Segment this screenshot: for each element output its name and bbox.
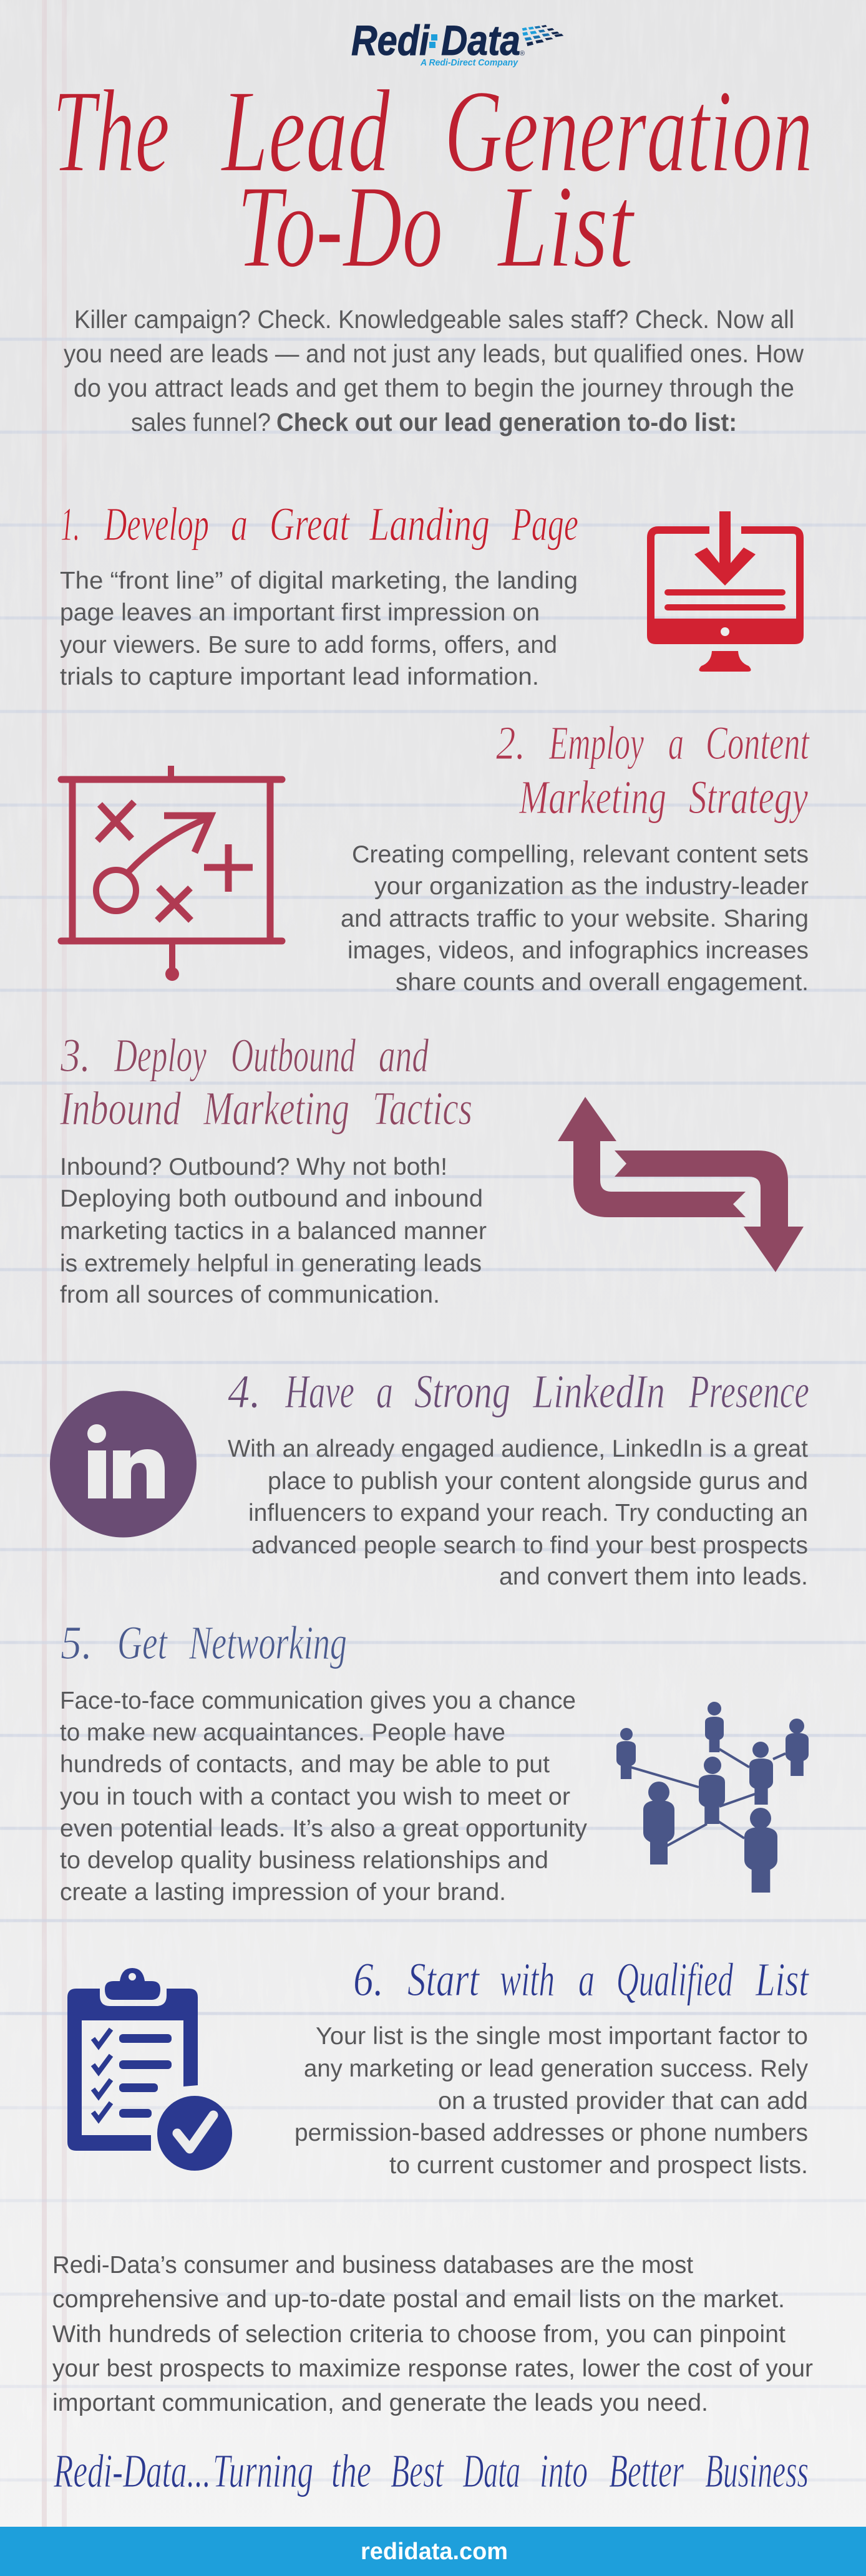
heading: step 3: Inbound xyxy=(59,1083,182,1135)
heading: step 6: Start xyxy=(407,1954,480,2006)
body: step 4: advanced people search to find your best prospects xyxy=(251,1532,808,1559)
heading: step 3: Tactics xyxy=(372,1083,472,1135)
heading: step 6: List xyxy=(755,1954,809,2006)
body: step 4: and convert them into leads. xyxy=(499,1563,808,1590)
heading: step 2: 2. xyxy=(496,717,525,769)
heading: step 2: Employ xyxy=(548,717,644,769)
title: List xyxy=(497,162,635,292)
intro paragraph: you need are leads — and not just any leads, but qualified ones. How xyxy=(64,339,804,368)
heading: step 4: a xyxy=(376,1366,393,1418)
icon: people network xyxy=(616,1702,809,1893)
tagline: Best xyxy=(391,2445,444,2497)
heading: step 2: a xyxy=(668,717,684,769)
closing paragraph xyxy=(52,2252,813,2416)
body: step 1: your viewers. Be sure to add forms, offers, and xyxy=(60,632,557,658)
tagline: Redi-Data... xyxy=(53,2445,211,2497)
heading: step 2: Marketing xyxy=(518,771,666,824)
panel: step 1 landing page xyxy=(60,498,804,690)
heading: step 5: Get xyxy=(117,1617,168,1669)
intro paragraph: Killer campaign? Check. Knowledgeable sales staff? Check. Now all xyxy=(74,305,794,334)
panel: step 3 outbound and inbound xyxy=(59,1030,804,1308)
body: step 5: create a lasting impression of your brand. xyxy=(60,1879,506,1906)
closing paragraph: your best prospects to maximize response rates, lower the cost of your xyxy=(52,2355,813,2382)
heading: step 4: 4. xyxy=(228,1366,261,1418)
body: step 6: to current customer and prospect lists. xyxy=(389,2152,808,2179)
intro paragraph: Check out our lead generation to-do list: xyxy=(276,408,737,437)
title xyxy=(52,66,813,292)
logo: Redi-Data: ® xyxy=(520,50,525,57)
heading: step 6: Qualified xyxy=(616,1954,734,2006)
body: step 6: on a trusted provider that can add xyxy=(438,2088,808,2115)
panel: step 2 content marketing xyxy=(61,717,810,996)
intro paragraph xyxy=(64,305,804,437)
body: step 5 xyxy=(60,1687,587,1906)
heading: step 4: Strong xyxy=(414,1366,510,1418)
body: step 6: permission-based addresses or phone numbers xyxy=(294,2120,808,2146)
body: step 6 xyxy=(294,2023,808,2179)
body: step 3: is extremely helpful in generating leads xyxy=(60,1250,482,1277)
body: step 4: With an already engaged audience, LinkedIn is a great xyxy=(228,1435,808,1462)
panel: step 4 linkedin xyxy=(50,1366,809,1590)
heading: step 1: Great xyxy=(270,498,350,551)
heading: step 2 xyxy=(496,717,810,824)
tagline xyxy=(53,2445,809,2497)
footer bar xyxy=(0,2527,866,2576)
logo: Redi-Data: Data xyxy=(441,17,520,64)
body: step 5: hundreds of contacts, and may be able to put xyxy=(60,1751,550,1778)
intro paragraph: sales funnel? xyxy=(131,408,271,437)
body: step 5: to develop quality business relationships and xyxy=(60,1847,548,1874)
body: step 4 xyxy=(228,1435,808,1590)
body: step 5: even potential leads. It’s also a great opportunity xyxy=(60,1815,587,1842)
body: step 3: Deploying both outbound and inbound xyxy=(60,1185,483,1212)
body: step 2: images, videos, and infographics increases xyxy=(348,937,809,964)
heading: step 5 xyxy=(61,1617,347,1669)
heading: step 1: Page xyxy=(511,498,578,551)
panel: step 6 qualified list xyxy=(67,1954,809,2179)
body: step 5: to make new acquaintances. People have xyxy=(60,1719,505,1746)
logo: Redi-Data xyxy=(351,17,563,68)
body: step 4: influencers to expand your reach. Try conducting an xyxy=(248,1500,808,1527)
icon: monitor with download arrow xyxy=(647,511,804,672)
title: The xyxy=(52,66,170,197)
heading: step 3 xyxy=(59,1030,472,1135)
heading: step 5: 5. xyxy=(61,1617,92,1669)
tagline: Better xyxy=(609,2445,684,2497)
body: step 2: share counts and overall engagement. xyxy=(396,969,809,996)
heading: step 6: 6. xyxy=(353,1954,384,2006)
footer bar: redidata.com xyxy=(361,2539,508,2565)
heading: step 6: a xyxy=(578,1954,595,2006)
body: step 3 xyxy=(60,1154,487,1308)
icon: two-way arrows xyxy=(558,1097,804,1272)
body: step 2: and attracts traffic to your website. Sharing xyxy=(341,905,809,932)
heading: step 1: Develop xyxy=(104,498,209,551)
icon: strategy board xyxy=(61,766,282,981)
icon: clipboard with checkmark xyxy=(67,1968,232,2171)
heading: step 5: Networking xyxy=(188,1617,347,1669)
closing paragraph: With hundreds of selection criteria to choose from, you can pinpoint xyxy=(52,2321,786,2348)
body: step 5: you in touch with a contact you wish to meet or xyxy=(60,1783,570,1810)
heading: step 4: Presence xyxy=(688,1366,809,1418)
panel: step 5 networking xyxy=(60,1617,809,1906)
heading: step 3: Outbound xyxy=(231,1030,356,1082)
heading: step 1: 1. xyxy=(61,498,80,551)
heading: step 1: a xyxy=(231,498,248,551)
body: step 3: marketing tactics in a balanced manner xyxy=(60,1218,487,1245)
body: step 1: trials to capture important lead information. xyxy=(60,663,539,690)
body: step 2 xyxy=(341,841,809,996)
logo: Redi-Data: A Redi-Direct Company xyxy=(420,57,518,68)
title: Lead xyxy=(220,66,391,197)
body: step 2: Creating compelling, relevant content sets xyxy=(352,841,809,868)
intro paragraph: do you attract leads and get them to begin the journey through the xyxy=(74,374,794,402)
body: step 4: place to publish your content alongside gurus and xyxy=(268,1468,808,1495)
body: step 1 xyxy=(60,567,578,690)
body: step 1: The “front line” of digital marketing, the landing xyxy=(60,567,578,594)
heading: step 3: and xyxy=(379,1030,429,1082)
title: To-Do xyxy=(237,162,443,292)
tagline: Turning xyxy=(213,2445,313,2497)
closing paragraph: important communication, and generate the leads you need. xyxy=(52,2390,708,2416)
body: step 1: page leaves an important first impression on xyxy=(60,599,540,626)
heading: step 4: LinkedIn xyxy=(532,1366,665,1418)
heading: step 6 xyxy=(353,1954,809,2006)
body: step 6: Your list is the single most important factor to xyxy=(316,2023,808,2050)
closing paragraph: comprehensive and up-to-date postal and email lists on the market. xyxy=(52,2286,785,2313)
heading: step 3: Deploy xyxy=(114,1030,207,1082)
body: step 5: Face-to-face communication gives you a chance xyxy=(60,1687,576,1714)
body: step 3: from all sources of communication. xyxy=(60,1281,440,1308)
closing paragraph: Redi-Data’s consumer and business databases are the most xyxy=(52,2252,693,2279)
logo: Redi-Data: Redi xyxy=(351,17,431,64)
heading: step 2: Strategy xyxy=(689,771,808,824)
tagline: Data xyxy=(462,2445,520,2497)
heading: step 4 xyxy=(228,1366,809,1418)
body: step 2: your organization as the industry-leader xyxy=(374,873,809,900)
heading: step 2: Content xyxy=(706,717,810,769)
icon: linkedin circle xyxy=(50,1391,197,1538)
heading: step 6: with xyxy=(500,1954,555,2006)
heading: step 3: 3. xyxy=(60,1030,90,1082)
heading: step 4: Have xyxy=(285,1366,354,1418)
heading: step 3: Marketing xyxy=(203,1083,349,1135)
tagline: into xyxy=(540,2445,588,2497)
tagline: the xyxy=(331,2445,371,2497)
heading: step 1 xyxy=(61,498,578,551)
heading: step 1: Landing xyxy=(369,498,490,551)
body: step 3: Inbound? Outbound? Why not both! xyxy=(60,1154,447,1180)
body: step 6: any marketing or lead generation success. Rely xyxy=(304,2055,808,2082)
